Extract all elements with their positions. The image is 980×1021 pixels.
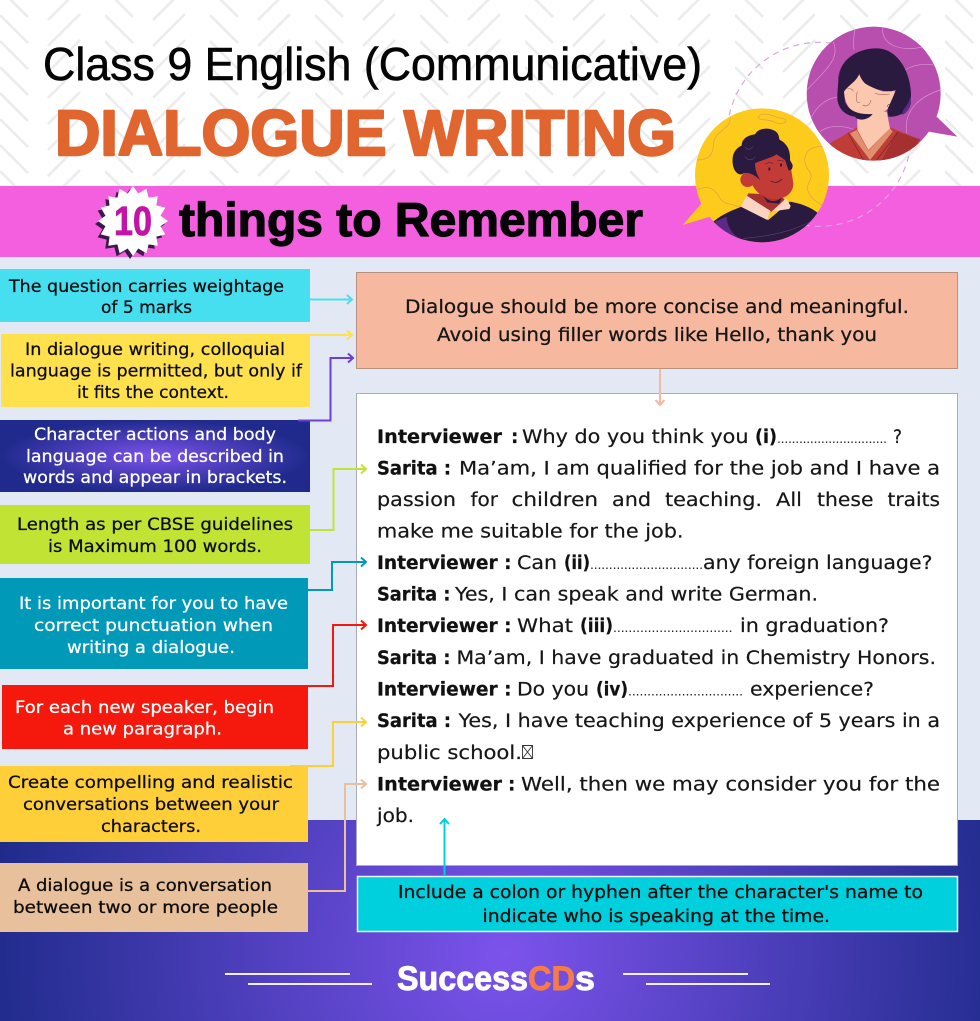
panel: definition note: between two or more people (13, 898, 278, 917)
dialogue line 9: Interviewer : (377, 680, 512, 700)
dialogue line 11: public school. (377, 743, 522, 764)
background: chevron header (0, 0, 980, 186)
arrow: definition to dialogue (308, 780, 366, 891)
icon: woman speech bubble (807, 27, 957, 167)
panel: compelling conversations note: Create compelling and realistic (8, 773, 293, 792)
panel: concise dialogue callout (356, 272, 958, 368)
background: light body (0, 257, 980, 820)
background: purple footer (0, 820, 980, 1021)
dialogue line 10: Sarita : (377, 711, 451, 732)
dialogue line 5: Can (517, 553, 557, 574)
title: dialogue writing: DIALOGUE WRITING (55, 97, 676, 169)
panel: length note (0, 505, 310, 564)
footer: left rule lines (225, 973, 372, 985)
panel: punctuation note (0, 578, 308, 669)
arrow: colloquial to callout (310, 330, 352, 340)
panel: sample dialogue (356, 394, 958, 866)
panel: new speaker note: a new paragraph. (63, 720, 222, 738)
arrow: punctuation to dialogue (308, 558, 366, 590)
dialogue line 3: these (817, 490, 874, 511)
panel: new speaker note (2, 685, 308, 749)
panel: actions and body language note: Character actions and body (34, 425, 276, 444)
panel: definition note: A dialogue is a conversation (18, 876, 272, 895)
dialogue line 12: Well, then we may consider you for the (521, 774, 940, 796)
panel: colloquial language note: In dialogue writing, colloquial (25, 340, 285, 359)
panel: weightage note: The question carries weightage (8, 277, 284, 296)
panel: actions and body language note (0, 420, 310, 492)
dialogue line 8: Ma’am, I have graduated in Chemistry Honors. (456, 648, 936, 669)
dialogue line 1: Interviewer (377, 427, 503, 448)
panel: colloquial language note (1, 334, 310, 407)
dialogue line 3: traits (888, 490, 940, 511)
dialogue line 1: : (511, 427, 518, 448)
dialogue line 9: experience? (750, 680, 874, 700)
dialogue line 8: Sarita : (377, 648, 450, 669)
footer: SuccessCDs logo: s (575, 960, 595, 998)
panel: definition note (0, 863, 308, 932)
panel: colon or hyphen note: indicate who is speaking at the time. (482, 907, 830, 927)
panel: colon or hyphen note: Include a colon or hyphen after the character's name to (398, 883, 923, 903)
dialogue line 7: in graduation? (740, 616, 889, 637)
footer: SuccessCDs logo: Success (397, 960, 528, 998)
dialogue line 5: .............................. (590, 556, 703, 572)
footer: SuccessCDs logo: CD (528, 960, 575, 998)
dialogue line 7: (iii) (580, 616, 613, 637)
dashed ring (727, 42, 911, 226)
panel: punctuation note: writing a dialogue. (67, 638, 235, 657)
panel: punctuation note: correct punctuation when (34, 616, 273, 635)
arrow: callout to dialogue (656, 369, 664, 405)
panel: compelling conversations note: conversations between your (23, 795, 279, 814)
dialogue line 9 (377, 680, 874, 700)
dialogue line 4: make me suitable for the job. (377, 522, 684, 542)
dialogue line 5 (377, 553, 932, 574)
arrow: colon note to dialogue (440, 819, 449, 876)
dialogue line 5: any foreign language? (703, 553, 932, 574)
dialogue line 1: ? (893, 427, 902, 448)
dialogue line 1: .............................. (777, 430, 887, 446)
dialogue line 1 (377, 427, 902, 448)
dialogue line 3: for (470, 490, 498, 511)
illustration: two speech bubbles (683, 27, 957, 245)
arrow: new speaker to dialogue (270, 620, 366, 686)
badge: number 10 starburst: 10 (114, 198, 152, 244)
panel: new speaker note: For each new speaker, begin (15, 698, 274, 717)
panel: length note: Length as per CBSE guidelines (17, 515, 293, 534)
dialogue line 10: Yes, I have teaching experience of 5 years in a (457, 711, 940, 732)
panel: actions and body language note: words and appear in brackets. (23, 468, 287, 487)
arrow: weightage to callout (310, 295, 352, 304)
dialogue line 5: (ii) (564, 553, 590, 574)
title: class line: Class 9 English (Communicative) (43, 38, 702, 90)
panel: actions and body language note: language can be described in (26, 447, 284, 466)
dialogue line 3 (377, 490, 940, 511)
panel: punctuation note: It is important for you to have (19, 594, 288, 613)
banner: pink band (0, 186, 980, 257)
dialogue line 6: Yes, I can speak and write German. (454, 584, 818, 606)
dialogue line 3: children (512, 490, 598, 511)
dialogue line 12 (377, 774, 940, 796)
panel: concise dialogue callout: Dialogue should be more concise and meaningful. (405, 296, 909, 318)
dialogue line 7: Interviewer : (377, 616, 512, 637)
dialogue line 2: Ma’am, I am qualified for the job and I have a (459, 458, 940, 480)
dialogue line 2: Sarita : (377, 458, 451, 480)
panel: colloquial language note: it fits the context. (77, 383, 229, 402)
arrow: conversations to dialogue (290, 718, 366, 766)
panel: weightage note: of 5 marks (101, 298, 192, 317)
dialogue line 9: .............................. (628, 682, 743, 698)
panel: weightage note (0, 269, 310, 322)
dialogue line 1: Why do you think you (522, 427, 748, 448)
dialogue line 6: Sarita : (377, 584, 450, 606)
dialogue line 9: (iv) (596, 680, 628, 700)
panel: concise dialogue callout: Avoid using filler words like Hello, thank you (437, 324, 877, 346)
footer: SuccessCDs logo (397, 960, 595, 998)
dialogue line 3: and (612, 490, 651, 511)
dialogue line 3: teaching. (665, 490, 762, 511)
dialogue line 3: passion (377, 490, 456, 511)
banner heading: things to Remember (179, 193, 643, 246)
dialogue line 7 (377, 616, 889, 637)
dialogue line 7: ............................... (613, 619, 732, 635)
panel: colon or hyphen note (358, 876, 958, 932)
panel: colloquial language note: language is permitted, but only if (10, 362, 303, 380)
panel: compelling conversations note: characters. (101, 817, 201, 836)
badge: number 10 starburst (95, 186, 168, 259)
panel: compelling conversations note (0, 766, 308, 842)
dialogue line 13: job. (376, 806, 414, 827)
arrow: length to dialogue (310, 464, 366, 530)
dialogue line 9: Do you (517, 680, 589, 700)
dialogue line 5: Interviewer : (377, 553, 512, 574)
arrow: body language to callout (298, 354, 353, 420)
icon: man speech bubble (683, 108, 829, 245)
dialogue line 3: All (776, 490, 802, 511)
dialogue line 1: (i) (755, 427, 777, 448)
footer: right rule lines (623, 973, 770, 985)
dialogue line 7: What (517, 616, 573, 637)
dialogue line 12: : (508, 774, 515, 796)
dialogue line 12: Interviewer (377, 774, 503, 796)
panel: length note: is Maximum 100 words. (48, 537, 262, 556)
